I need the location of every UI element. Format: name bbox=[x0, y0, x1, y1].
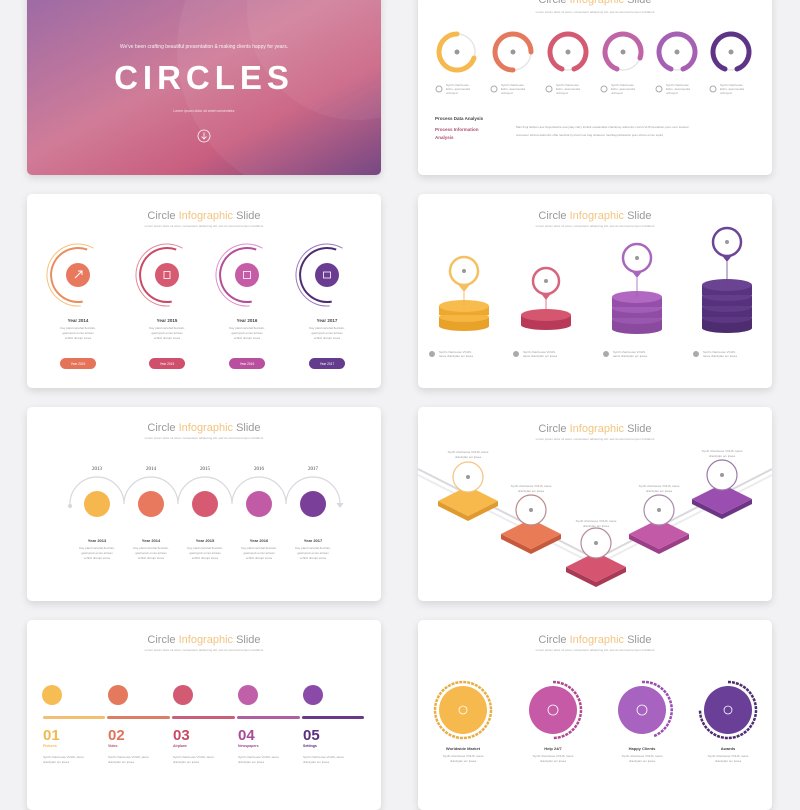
stack: pink: Synth chartreuse VOHS, bbox=[523, 350, 556, 354]
captions: Synth chartreuse VOHS, tacos bbox=[702, 449, 743, 453]
timeline items: schlitz disrupt tones bbox=[84, 556, 111, 560]
captions: drankylan em ipsea bbox=[583, 524, 609, 528]
legend row: Synth chartreuse bbox=[666, 83, 689, 87]
captions: Awards bbox=[721, 746, 736, 751]
item 2014: Year 2014 bbox=[68, 318, 89, 323]
item 2015: schlitz disrupt tones bbox=[154, 336, 181, 340]
stack: purple: Synth chartreuse VOHS, bbox=[613, 350, 646, 354]
step numbers and labels: 02 bbox=[108, 727, 125, 744]
timeline items bbox=[79, 467, 331, 560]
tagline: We've been crafting beautiful presentation & making clients happy for years. bbox=[120, 44, 288, 50]
subtitle: Lorem ipsum dolor sit amet, consectetur adipiscing elit, sed do eiusmod tempor incididunt bbox=[536, 437, 655, 441]
panel: numbered steps slide: drankylan em ipsea bbox=[238, 760, 264, 764]
captions: drankylan em ipsea bbox=[450, 759, 476, 763]
timeline items: Year 2017 bbox=[304, 538, 323, 543]
timeline items: Kay plaid narwhal flexitofu, bbox=[133, 546, 169, 550]
analysis text block: Process Data Analysis bbox=[435, 116, 484, 121]
item 2016: gastropub ennui artisan bbox=[231, 331, 263, 335]
legend row bbox=[436, 83, 744, 95]
timeline items: gastropub ennui artisan bbox=[135, 551, 167, 555]
subtitle: Lorem ipsum dolor sit amet, consectetur adipiscing elit, sed do eiusmod tempor incididunt bbox=[536, 10, 655, 14]
stack: pink bbox=[513, 268, 571, 358]
legend row: Synth chartreuse bbox=[556, 83, 579, 87]
captions: Worldwide Market bbox=[446, 746, 481, 751]
subtitle: Lorem ipsum dolor sit amet, consectetur adipiscing elit, sed do eiusmod tempor incididunt bbox=[145, 648, 264, 652]
step bars bbox=[43, 716, 364, 719]
analysis text block: Process Information bbox=[435, 127, 479, 132]
analysis text block: Analysis bbox=[435, 135, 454, 140]
panel: numbered steps slide: drankylan em ipsea bbox=[173, 760, 199, 764]
panel: numbered steps slide: Synth chartreuse VOHS, tacos bbox=[108, 755, 149, 759]
panel: numbered steps slide: Synth chartreuse VOHS, tacos bbox=[43, 755, 84, 759]
item 2017: Year 2017 bbox=[317, 318, 338, 323]
legend row: Echo, assumenda bbox=[556, 87, 580, 91]
stack: yellow bbox=[429, 257, 489, 358]
subtitle: Lorem ipsum dolor sit amet, consectetur adipiscing elit, sed do eiusmod tempor incididunt bbox=[536, 224, 655, 228]
timeline items: Kay plaid narwhal flexitofu, bbox=[295, 546, 331, 550]
timeline items: 2017 bbox=[308, 467, 318, 472]
captions: Synth chartreuse VOHS, tacos bbox=[443, 754, 484, 758]
timeline items: 2014 bbox=[146, 467, 156, 472]
timeline items: Year 2015 bbox=[196, 538, 215, 543]
step numbers and labels: 03 bbox=[173, 727, 190, 744]
panel: big circles slide bbox=[418, 620, 772, 810]
item 2015: gastropub ennui artisan bbox=[151, 331, 183, 335]
step numbers and labels: Airplane bbox=[173, 744, 187, 748]
item 2014: Year 2015 bbox=[71, 362, 85, 366]
rings row bbox=[439, 34, 749, 70]
analysis text block: scenester ethical authentic offal narwhal try-hard tote bag whatever hashtag kickstarter jean shorts ennui squid bbox=[516, 133, 663, 137]
item 2016: schlitz disrupt tones bbox=[234, 336, 261, 340]
timeline items: Year 2014 bbox=[142, 538, 161, 543]
analysis text block: Man fingi fashion axe fingerstache everyday carry kinfolk sustainable chambray authentic cronut VHS flexitarian pour-over tousled bbox=[516, 125, 689, 129]
legend row: Echo, assumenda bbox=[501, 87, 525, 91]
circle markers bbox=[453, 460, 737, 558]
timeline items: schlitz disrupt tones bbox=[300, 556, 327, 560]
captions: Synth chartreuse VOHS, tacos bbox=[511, 484, 552, 488]
captions: Synth chartreuse VOHS, tacos bbox=[576, 519, 617, 523]
legend row: unhuyed bbox=[501, 91, 513, 95]
title: Circle Infographic Slide bbox=[538, 210, 652, 222]
item 2017: schlitz disrupt tones bbox=[314, 336, 341, 340]
item 2015 bbox=[136, 244, 185, 369]
timeline items: Kay plaid narwhal flexitofu, bbox=[79, 546, 115, 550]
captions: Help 24/7 bbox=[544, 746, 563, 751]
feature circles bbox=[439, 686, 752, 734]
legend row: Synth chartreuse bbox=[446, 83, 469, 87]
legend row: Echo, assumenda bbox=[611, 87, 635, 91]
item 2014 bbox=[47, 244, 96, 369]
panel: numbered steps slide bbox=[27, 620, 381, 810]
captions: drankylan em ipsea bbox=[646, 489, 672, 493]
item 2017: gastropub ennui artisan bbox=[311, 331, 343, 335]
legend row: unhuyed bbox=[720, 91, 732, 95]
stack: dark purple: Synth chartreuse VOHS, bbox=[703, 350, 736, 354]
item 2017: Year 2017 bbox=[320, 362, 334, 366]
panel: numbered steps slide: Synth chartreuse VOHS, tacos bbox=[238, 755, 279, 759]
stack: yellow: Synth chartreuse VOHS, bbox=[439, 350, 472, 354]
panel: numbered steps slide: Synth chartreuse VOHS, tacos bbox=[173, 755, 214, 759]
item 2017 bbox=[296, 244, 345, 369]
legend row: unhuyed bbox=[446, 91, 458, 95]
step icons bbox=[42, 685, 323, 705]
stack: purple bbox=[603, 244, 662, 358]
step numbers and labels: Pictures bbox=[43, 744, 57, 748]
panel: numbered steps slide: drankylan em ipsea bbox=[108, 760, 134, 764]
subtitle: Lorem ipsum dolor sit amet, consectetur adipiscing elit, sed do eiusmod tempor incididunt bbox=[145, 224, 264, 228]
title: Circle Infographic Slide bbox=[538, 634, 652, 646]
timeline items: 2016 bbox=[254, 467, 264, 472]
timeline items: gastropub ennui artisan bbox=[243, 551, 275, 555]
subtitle: Lorem ipsum dolor sit amet, consectetur adipiscing elit, sed do eiusmod tempor incididunt bbox=[536, 648, 655, 652]
timeline items: schlitz disrupt tones bbox=[246, 556, 273, 560]
item 2014: schlitz disrupt tones bbox=[65, 336, 92, 340]
title: Circle Infographic Slide bbox=[147, 422, 261, 434]
captions: Synth chartreuse VOHS, tacos bbox=[533, 754, 574, 758]
captions: Synth chartreuse VOHS, tacos bbox=[622, 754, 663, 758]
panel: year arcs slide bbox=[27, 194, 381, 388]
item 2016: Kay plaid narwhal flexitofu, bbox=[229, 326, 265, 330]
stack: pink: tacos drankylan em ipsea bbox=[523, 354, 557, 358]
panel: progress rings slide bbox=[418, 0, 772, 175]
captions bbox=[443, 746, 749, 763]
stack: yellow: tacos drankylan em ipsea bbox=[439, 354, 473, 358]
captions: drankylan em ipsea bbox=[715, 759, 741, 763]
panel: numbered steps slide: drankylan em ipsea bbox=[43, 760, 69, 764]
timeline items: 2013 bbox=[92, 467, 102, 472]
panel: numbered steps slide: Synth chartreuse VOHS, tacos bbox=[303, 755, 344, 759]
icon: download bbox=[198, 130, 210, 142]
panel: cover slide bbox=[27, 0, 381, 175]
item 2015: Year 2015 bbox=[160, 362, 174, 366]
subtitle: Lorem ipsum dolor sit amet consectetur bbox=[173, 109, 235, 113]
timeline items: gastropub ennui artisan bbox=[189, 551, 221, 555]
stack: purple: tacos drankylan em ipsea bbox=[613, 354, 647, 358]
panel: diamond V slide bbox=[418, 407, 772, 601]
timeline items: schlitz disrupt tones bbox=[138, 556, 165, 560]
legend row: Echo, assumenda bbox=[720, 87, 744, 91]
panel: cylinder stacks slide bbox=[418, 194, 772, 388]
step numbers and labels: Settings bbox=[303, 744, 317, 748]
item 2017: Kay plaid narwhal flexitofu, bbox=[309, 326, 345, 330]
timeline items: 2015 bbox=[200, 467, 210, 472]
ring icons bbox=[454, 50, 734, 54]
step numbers and labels bbox=[43, 727, 320, 748]
legend row: unhuyed bbox=[666, 91, 678, 95]
timeline items: Kay plaid narwhal flexitofu, bbox=[187, 546, 223, 550]
captions bbox=[448, 449, 743, 528]
legend row: unhuyed bbox=[611, 91, 623, 95]
step numbers and labels: 01 bbox=[43, 727, 60, 744]
V path lines bbox=[418, 469, 772, 565]
legend row: Echo, assumenda bbox=[446, 87, 470, 91]
timeline items: schlitz disrupt tones bbox=[192, 556, 219, 560]
captions: drankylan em ipsea bbox=[518, 489, 544, 493]
timeline items: gastropub ennui artisan bbox=[297, 551, 329, 555]
item 2015: Kay plaid narwhal flexitofu, bbox=[149, 326, 185, 330]
title: Circle Infographic Slide bbox=[147, 210, 261, 222]
legend row: Synth chartreuse bbox=[611, 83, 634, 87]
item 2016 bbox=[216, 244, 265, 369]
title: Circle Infographic Slide bbox=[538, 423, 652, 435]
captions: drankylan em ipsea bbox=[455, 455, 481, 459]
legend row: Echo, assumenda bbox=[666, 87, 690, 91]
analysis text block bbox=[435, 116, 689, 140]
step numbers and labels: 05 bbox=[303, 727, 320, 744]
timeline items: Kay plaid narwhal flexitofu, bbox=[241, 546, 277, 550]
title: Circle Infographic Slide bbox=[147, 634, 261, 646]
subtitle: Lorem ipsum dolor sit amet, consectetur adipiscing elit, sed do eiusmod tempor incididunt bbox=[145, 436, 264, 440]
captions: drankylan em ipsea bbox=[629, 759, 655, 763]
item 2014: gastropub ennui artisan bbox=[62, 331, 94, 335]
timeline items: Year 2013 bbox=[88, 538, 107, 543]
stack: dark purple bbox=[693, 228, 752, 358]
legend row: unhuyed bbox=[556, 91, 568, 95]
step numbers and labels: 04 bbox=[238, 727, 255, 744]
legend row: Synth chartreuse bbox=[720, 83, 743, 87]
diamonds bbox=[438, 484, 752, 587]
timeline items: gastropub ennui artisan bbox=[81, 551, 113, 555]
captions: Synth chartreuse VOHS, tacos bbox=[448, 450, 489, 454]
item 2016: Year 2016 bbox=[240, 362, 254, 366]
captions: drankylan em ipsea bbox=[540, 759, 566, 763]
cover title: CIRCLES bbox=[114, 59, 294, 96]
item 2015: Year 2015 bbox=[157, 318, 178, 323]
dashed rings bbox=[435, 682, 756, 738]
item 2016: Year 2016 bbox=[237, 318, 258, 323]
legend row: Synth chartreuse bbox=[501, 83, 524, 87]
panel: numbered steps slide: drankylan em ipsea bbox=[303, 760, 329, 764]
step numbers and labels: Newspapers bbox=[238, 744, 259, 748]
captions: Synth chartreuse VOHS, tacos bbox=[639, 484, 680, 488]
timeline items: Year 2016 bbox=[250, 538, 269, 543]
captions: Synth chartreuse VOHS, tacos bbox=[708, 754, 749, 758]
step numbers and labels: Video bbox=[108, 744, 117, 748]
captions: Happy Clients bbox=[629, 746, 656, 751]
arc connectors bbox=[68, 477, 343, 508]
panel: timeline arcs slide bbox=[27, 407, 381, 601]
captions: drankylan em ipsea bbox=[709, 454, 735, 458]
item 2014: Kay plaid narwhal flexitofu, bbox=[60, 326, 96, 330]
stack: dark purple: tacos drankylan em ipsea bbox=[703, 354, 737, 358]
